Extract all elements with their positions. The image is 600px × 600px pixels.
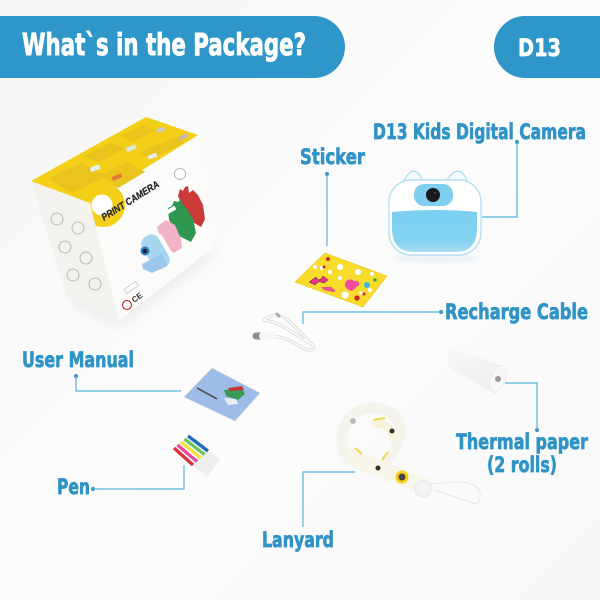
leader line: pen	[91, 465, 184, 491]
product box	[31, 117, 216, 323]
label: user manual: User Manual	[22, 348, 134, 372]
product box: CE	[130, 291, 145, 305]
label: two rolls: (2 rolls)	[487, 453, 557, 477]
leader line: lanyard	[303, 472, 355, 527]
header banner: title	[0, 16, 345, 78]
sticker sheet	[295, 253, 387, 307]
lanyard	[342, 408, 480, 504]
leader line: thermal paper	[505, 383, 539, 432]
leader line: user manual	[74, 374, 181, 391]
camera	[389, 171, 481, 263]
header badge: model D13	[494, 16, 600, 78]
leader line: camera	[482, 140, 519, 217]
header badge: model D13: D13	[518, 34, 561, 62]
label: lanyard: Lanyard	[262, 528, 334, 552]
box label: print camera: PRINT CAMERA	[100, 179, 162, 224]
header banner: title: What`s in the Package?	[22, 28, 306, 63]
label: pen: Pen	[57, 475, 90, 499]
user manual booklet	[184, 368, 260, 421]
pens	[174, 436, 220, 477]
leader line: recharge cable	[303, 310, 443, 324]
recharge cable	[256, 314, 314, 350]
label: sticker: Sticker	[300, 145, 366, 169]
thermal paper roll	[448, 348, 509, 395]
leader line: sticker	[325, 172, 329, 246]
